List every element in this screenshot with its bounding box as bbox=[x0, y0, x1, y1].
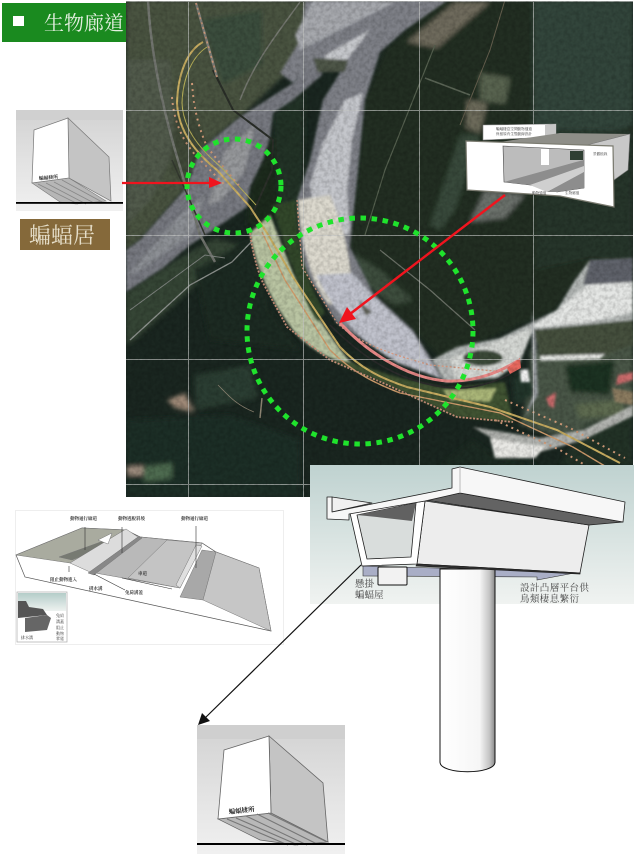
red arrow: to large zone bbox=[339, 195, 505, 323]
tunnel section callout: 生物廊道 bbox=[565, 190, 580, 195]
label: bat house bbox=[20, 219, 110, 250]
grid lines bbox=[126, 0, 634, 498]
highway alignment bbox=[172, 3, 625, 485]
inset detail: 兔肩 bbox=[56, 612, 64, 618]
leader lines bbox=[69, 526, 196, 590]
title bar: 生物廊道 bbox=[44, 12, 124, 35]
green dotted circle: small zone bbox=[187, 139, 281, 233]
inset detail: 動物 bbox=[56, 630, 64, 636]
south-east road bbox=[473, 369, 633, 458]
inset detail: 溝蓋 bbox=[56, 618, 64, 624]
left river branch bbox=[126, 43, 322, 292]
tunnel section callout: 景觀植栽 bbox=[593, 151, 608, 156]
label: bat roost: 蝙蝠棲所 bbox=[228, 804, 256, 816]
red arrow: to small zone bbox=[122, 177, 222, 188]
label: hanging bat house: 蝙蝠屋 bbox=[355, 589, 384, 601]
bridge panel bbox=[310, 465, 634, 772]
black arrow: to bat house bbox=[198, 565, 361, 725]
diagram labels: 兔肩溝蓋 bbox=[125, 589, 143, 596]
bat house thumbnail: 蝙蝠棲所 bbox=[39, 173, 58, 182]
label: hanging bat house: 懸掛 bbox=[355, 578, 375, 590]
tunnel section callout: 蝙蝠棲息空間動物通道 bbox=[496, 126, 532, 131]
road surfaces bbox=[16, 528, 271, 631]
fields south-east bbox=[512, 332, 633, 464]
east river bbox=[432, 258, 633, 425]
inset detail: 排水溝 bbox=[21, 634, 33, 640]
main river bbox=[280, 0, 448, 380]
farmland north-west bbox=[126, 0, 310, 345]
diagram labels: 動物通行廊道 bbox=[181, 515, 208, 522]
box girder bbox=[327, 467, 625, 574]
tunnel section callout: 動物通道 bbox=[532, 190, 547, 195]
forest highlights south bbox=[126, 240, 300, 497]
inset detail bbox=[17, 592, 67, 642]
diagram labels: 阻止動物進入 bbox=[50, 576, 77, 583]
diagram labels bbox=[50, 515, 208, 596]
bridge column bbox=[440, 569, 495, 772]
forest and fields east bbox=[350, 0, 633, 358]
inset detail: 阻止 bbox=[56, 624, 64, 630]
green dotted circle: large zone bbox=[247, 218, 473, 444]
diagram labels: 排水溝 bbox=[89, 585, 103, 592]
diagram labels: 動物逃脫斜坡 bbox=[118, 515, 145, 522]
label: bird platform: 設計凸層平台供 bbox=[520, 582, 589, 594]
label: bat house: 蝙蝠居 bbox=[29, 223, 95, 248]
road cross-section diagram bbox=[16, 510, 284, 644]
bat house enlarged bbox=[197, 725, 345, 854]
inset detail: 掌爬 bbox=[56, 635, 64, 641]
title bar bbox=[2, 3, 126, 42]
bat house thumbnail bbox=[16, 110, 123, 211]
diagram labels: 動物通行廊道 bbox=[70, 515, 97, 522]
label: bird platform: 鳥類棲息繁衍 bbox=[520, 593, 580, 605]
construction strip along curve bbox=[250, 215, 353, 365]
satellite map bbox=[126, 0, 634, 498]
map texture bbox=[126, 0, 634, 498]
tunnel section callout: 保留原有生態動線設計 bbox=[496, 131, 532, 136]
label: bird platform bbox=[520, 582, 589, 605]
hanging bat house and platform bbox=[363, 566, 580, 585]
north roads bbox=[130, 0, 505, 418]
label: hanging bat house bbox=[355, 578, 384, 601]
diagram labels: 車道 bbox=[138, 570, 147, 577]
tunnel section callout bbox=[466, 124, 630, 207]
